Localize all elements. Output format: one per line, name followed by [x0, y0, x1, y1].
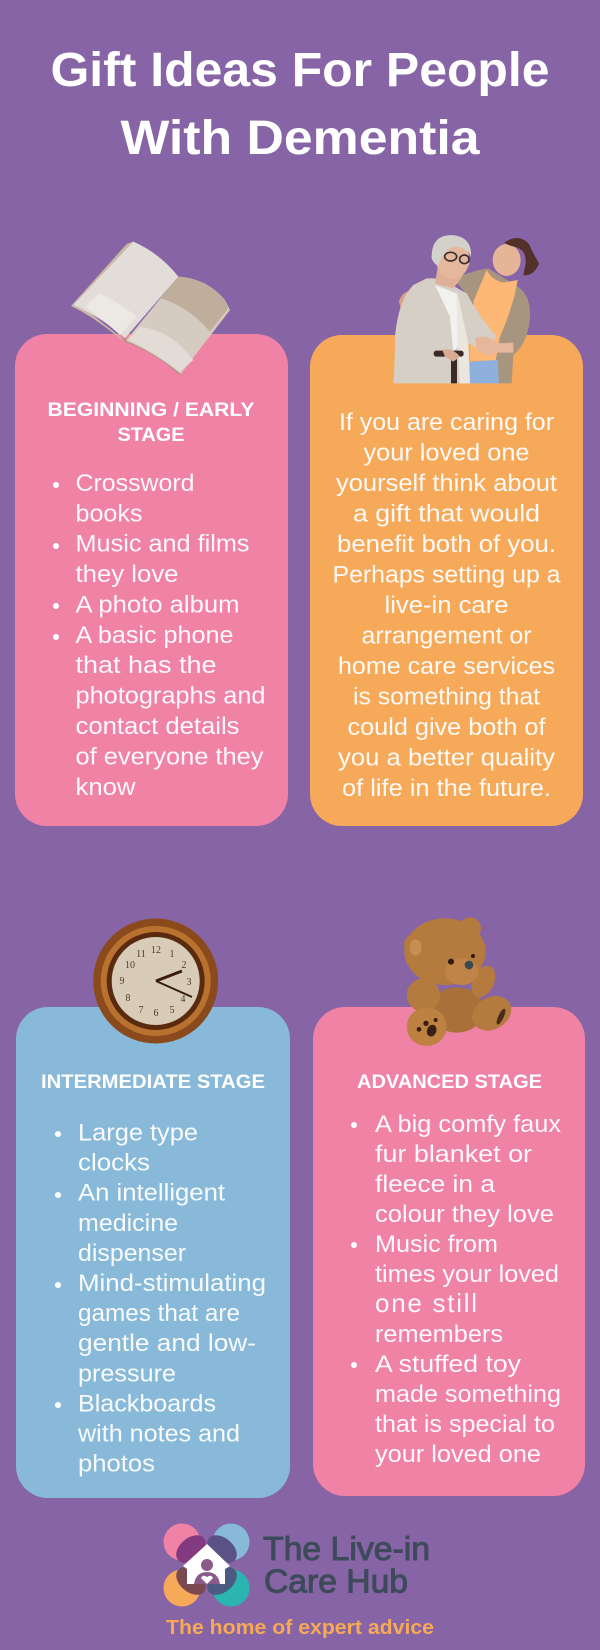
text block: caring advice: is something that [353, 684, 540, 710]
list: early stage gifts: know [76, 774, 136, 801]
list: intermediate stage gifts: with notes and [77, 1420, 240, 1448]
list: intermediate stage gifts: medicine [78, 1210, 178, 1237]
logo mark [164, 1524, 250, 1606]
text block: caring advice: live-in care [384, 592, 508, 619]
list: intermediate stage gifts: dispenser [78, 1240, 186, 1267]
icon: wall clock: 8 [126, 993, 130, 1004]
list: intermediate stage gifts: An intelligent [78, 1180, 225, 1207]
list: intermediate stage gifts: games that are [78, 1300, 240, 1327]
list: early stage gifts: Music and films [76, 531, 250, 558]
list: advanced stage gifts: times your loved [375, 1261, 559, 1288]
list: early stage gifts: books [76, 500, 142, 527]
text block: caring advice: benefit both of you. [337, 531, 556, 558]
icon: wall clock: 12 [151, 945, 161, 956]
icon: wall clock: 7 [138, 1005, 144, 1016]
list: advanced stage gifts: made something [375, 1381, 561, 1408]
text block: caring advice: you a better quality [338, 744, 555, 772]
title [50, 44, 550, 165]
list: intermediate stage gifts: gentle and low- [78, 1330, 256, 1357]
icon: wall clock: 5 [170, 1005, 174, 1016]
logo wordmark [263, 1530, 430, 1600]
list: intermediate stage gifts: photos [78, 1451, 155, 1478]
heading: intermediate stage: INTERMEDIATE STAGE [41, 1072, 265, 1093]
text block: caring advice: home care services [338, 653, 555, 680]
list: advanced stage gifts: A stuffed toy [375, 1351, 521, 1378]
icon: open book [71, 242, 230, 375]
list: intermediate stage gifts [55, 1120, 266, 1478]
list: advanced stage gifts: fleece in a [375, 1171, 496, 1198]
icon: wall clock: 1 [170, 949, 174, 960]
icon: wall clock [93, 918, 218, 1044]
list: early stage gifts: of everyone they [76, 743, 264, 770]
panel: caring advice [310, 335, 583, 826]
list: early stage gifts: they love [76, 561, 178, 588]
list: early stage gifts: that has the [76, 652, 216, 679]
list: early stage gifts: A photo album [76, 591, 240, 618]
text block: caring advice: arrangement or [362, 622, 532, 650]
list: advanced stage gifts: your loved one [375, 1441, 541, 1468]
title: Gift Ideas For People [50, 44, 550, 97]
logo wordmark: The Live-in [263, 1530, 430, 1567]
text block: caring advice: Perhaps setting up a [332, 562, 561, 588]
heading: advanced stage: ADVANCED STAGE [357, 1072, 542, 1093]
list: intermediate stage gifts: Large type [78, 1120, 198, 1146]
list: early stage gifts [53, 470, 266, 801]
list: early stage gifts: A basic phone [76, 622, 234, 649]
icon: wall clock: 9 [120, 976, 124, 987]
icon: wall clock: 3 [186, 977, 192, 988]
list: advanced stage gifts: fur blanket or [375, 1141, 532, 1168]
panel: advanced stage [313, 1007, 585, 1496]
list: early stage gifts: contact details [76, 713, 240, 740]
list: advanced stage gifts: colour they love [375, 1201, 554, 1228]
list: intermediate stage gifts: Blackboards [78, 1390, 216, 1417]
panel: intermediate stage [16, 1007, 290, 1498]
list: intermediate stage gifts: Mind-stimulating [78, 1270, 266, 1297]
icon: wall clock: 10 [125, 960, 135, 971]
text block: caring advice: could give both of [348, 714, 546, 741]
list: intermediate stage gifts: clocks [78, 1150, 150, 1177]
tagline: The home of expert advice [166, 1617, 434, 1639]
text block: caring advice [332, 409, 561, 802]
logo wordmark: Care Hub [264, 1562, 408, 1600]
icon: carer and older woman [393, 235, 539, 383]
text block: caring advice: of life in the future. [342, 775, 551, 802]
heading: beginning stage: BEGINNING / EARLY [48, 400, 255, 421]
text block: caring advice: yourself think about [336, 470, 557, 497]
list: advanced stage gifts: Music from [375, 1231, 498, 1258]
panel: beginning / early stage [15, 334, 288, 826]
heading: beginning stage [48, 400, 255, 446]
icon: wall clock: 6 [154, 1008, 158, 1019]
list: advanced stage gifts: that is special to [375, 1411, 555, 1438]
icon: teddy bear [404, 917, 518, 1046]
list: advanced stage gifts: A big comfy faux [375, 1111, 561, 1138]
list: intermediate stage gifts: pressure [78, 1360, 176, 1387]
icon: wall clock: 11 [136, 949, 146, 960]
list: advanced stage gifts: one still [375, 1288, 477, 1318]
text block: caring advice: a gift that would [353, 500, 540, 528]
list: advanced stage gifts [351, 1111, 561, 1468]
icon: wall clock: 4 [180, 994, 186, 1005]
text block: caring advice: your loved one [364, 440, 530, 466]
logo [164, 1524, 434, 1639]
heading: beginning stage: STAGE [118, 425, 184, 446]
list: early stage gifts: photographs and [76, 683, 266, 710]
list: advanced stage gifts: remembers [375, 1321, 503, 1348]
icon: wall clock: 2 [182, 960, 186, 971]
text block: caring advice: If you are caring for [339, 409, 554, 436]
list: early stage gifts: Crossword [76, 470, 194, 497]
title: With Dementia [120, 112, 480, 165]
